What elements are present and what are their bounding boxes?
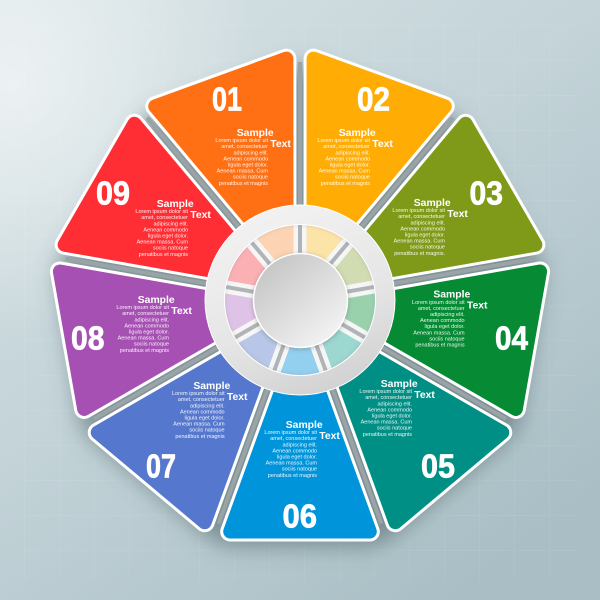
shape 07 xyxy=(98,290,325,522)
text block 06: penatibus et magnis xyxy=(268,473,317,479)
text block 07: Lorem ipsum dolor sit xyxy=(172,391,225,397)
text block 02: ligula eget dolor. xyxy=(330,162,370,168)
number 01: 01 xyxy=(212,80,242,118)
text block 01: Lorem ipsum dolor sit xyxy=(215,138,268,144)
segment 04 green xyxy=(332,239,540,409)
pastel colour wheel xyxy=(221,220,379,378)
text block 06: sociis natoque xyxy=(282,467,317,473)
text block 05 xyxy=(359,379,435,438)
number 02: 02 xyxy=(357,80,390,118)
text block 04: Aenean massa. Cum xyxy=(413,330,465,336)
text block 06: ligula eget dolor. xyxy=(277,454,317,460)
text block 05: amet, consectetuer xyxy=(365,395,412,401)
segment 02 amber xyxy=(250,59,445,282)
text block 03: Sample xyxy=(414,198,451,209)
shape 02 xyxy=(250,59,445,282)
text block 05: penatibus et magnis xyxy=(363,432,412,438)
text block 07 xyxy=(172,381,248,440)
text block 07: penatibus et magnis xyxy=(175,434,225,440)
text block 06: Lorem ipsum dolor sit xyxy=(264,430,317,436)
text block 01: Sample xyxy=(237,128,274,139)
number 07: 07 xyxy=(146,448,176,484)
text block 03: ligula eget dolor. xyxy=(405,232,445,238)
text block 09: Sample xyxy=(157,199,194,210)
number 09: 09 xyxy=(96,174,130,212)
text block 03: Lorem ipsum dolor sit xyxy=(392,208,445,214)
text block 04: ligula eget dolor. xyxy=(425,324,465,330)
shape 08 xyxy=(60,239,268,409)
text block 01: Text xyxy=(270,139,291,150)
number 08: 08 xyxy=(71,320,104,356)
text block 09: penatibus et magnis xyxy=(139,252,188,258)
shape 01 xyxy=(155,59,350,282)
text block 03: Text xyxy=(447,209,468,220)
text block 06: Sample xyxy=(286,420,323,431)
text block 07: amet, consectetuer xyxy=(178,397,225,403)
shape 05 xyxy=(275,290,502,522)
text block 06: Aenean massa. Cum xyxy=(266,461,317,467)
text block 02: penatibus et magnis xyxy=(321,181,370,187)
text block 09: Aenean massa. Cum xyxy=(137,240,188,246)
segment 08 purple xyxy=(60,239,268,409)
central hub xyxy=(205,205,395,395)
text block 05: sociis natoque xyxy=(377,426,412,432)
shape 03 xyxy=(304,124,535,338)
text block 06: Aenean commodo xyxy=(272,448,317,454)
text block 02: Sample xyxy=(339,128,376,139)
text block 07: Sample xyxy=(193,381,231,392)
number 04: 04 xyxy=(495,320,529,356)
text block 08: adipiscing elit. xyxy=(134,317,169,323)
text block 05: Lorem ipsum dolor sit xyxy=(359,389,412,395)
text block 04: Aenean commodo xyxy=(420,318,465,324)
text block 04: Sample xyxy=(433,290,471,301)
outer ring xyxy=(205,205,395,395)
text block 01: ligula eget dolor. xyxy=(228,162,268,168)
text block 02 xyxy=(317,128,393,187)
text block 02: Lorem ipsum dolor sit xyxy=(317,138,370,144)
text block 09: amet, consectetuer xyxy=(141,215,188,221)
text block 08: amet, consectetuer xyxy=(122,311,169,317)
text block 03: adipiscing elit. xyxy=(410,220,445,226)
centre cap xyxy=(252,254,348,350)
text block 01: amet, consectetuer xyxy=(221,144,268,150)
text block 04: Lorem ipsum dolor sit xyxy=(412,300,465,306)
text block 05: adipiscing elit. xyxy=(377,401,412,407)
text block 05: Aenean commodo xyxy=(367,407,412,413)
text block 01 xyxy=(215,128,291,187)
text block 02: sociis natoque xyxy=(335,175,370,181)
text block 03: penatibus et magnis. xyxy=(394,251,445,257)
text block 04 xyxy=(412,290,488,348)
text block 04: adipiscing elit. xyxy=(430,312,465,318)
segment 06 blue xyxy=(230,345,370,534)
text block 03: Aenean massa. Cum xyxy=(394,239,445,245)
text block 02: Text xyxy=(372,139,393,150)
text block 03 xyxy=(392,198,468,257)
text block 03: amet, consectetuer xyxy=(398,214,445,220)
text block 01: sociis natoque xyxy=(233,175,268,181)
text block 06: Text xyxy=(319,431,340,442)
text block 08: ligula eget dolor. xyxy=(129,330,169,336)
text block 08: penatibus et magnis xyxy=(120,348,169,354)
text block 05: Text xyxy=(414,390,435,401)
grey gaps between segments xyxy=(66,62,534,524)
text block 09 xyxy=(135,199,211,258)
number 06: 06 xyxy=(282,498,317,534)
text block 09: adipiscing elit. xyxy=(153,221,188,227)
spokes xyxy=(223,222,377,373)
text block 08 xyxy=(116,295,192,354)
text block 01: adipiscing elit. xyxy=(233,150,268,156)
shape 04 xyxy=(332,239,540,409)
text block 09: Text xyxy=(190,210,211,221)
text block 01: Aenean commodo xyxy=(223,156,268,162)
text block 03: Aenean commodo xyxy=(400,226,445,232)
segment 05 teal xyxy=(275,290,502,522)
text block 08: Sample xyxy=(138,295,175,306)
text block 05: ligula eget dolor. xyxy=(372,414,412,420)
text block 07: Text xyxy=(227,392,248,403)
number 05: 05 xyxy=(421,448,455,484)
text block 09: sociis natoque xyxy=(153,246,188,252)
text block 08: Aenean massa. Cum xyxy=(118,336,169,342)
text block 02: amet, consectetuer xyxy=(323,144,370,150)
text block 07: ligula eget dolor. xyxy=(185,416,225,422)
text block 08: Lorem ipsum dolor sit xyxy=(116,305,169,311)
text block 05: Aenean massa. Cum xyxy=(361,420,412,426)
segment 01 orange xyxy=(155,59,350,282)
segment 03 olive xyxy=(304,124,535,338)
text block 07: adipiscing elit. xyxy=(190,403,225,409)
text block 09: ligula eget dolor. xyxy=(148,234,188,240)
text block 09: Lorem ipsum dolor sit xyxy=(135,209,188,215)
text block 04: penatibus et magnis xyxy=(415,343,465,349)
text block 06: amet, consectetuer xyxy=(270,436,317,442)
shape 06 xyxy=(230,345,370,532)
text block 02: adipiscing elit. xyxy=(335,150,370,156)
text block 04: Text xyxy=(467,301,488,312)
text block 02: Aenean massa. Cum xyxy=(319,169,370,175)
text block 06: adipiscing elit. xyxy=(282,442,317,448)
text block 09: Aenean commodo xyxy=(143,227,188,233)
text block 07: sociis natoque xyxy=(189,428,225,434)
text block 02: Aenean commodo xyxy=(325,156,370,162)
text block 01: Aenean massa. Cum xyxy=(217,169,268,175)
text block 04: sociis natoque xyxy=(429,336,465,342)
segment 09 red xyxy=(65,124,296,338)
text block 08: Aenean commodo xyxy=(124,323,169,329)
text block 03: sociis natoque xyxy=(410,245,445,251)
text block 05: Sample xyxy=(381,379,418,390)
text block 08: sociis natoque xyxy=(134,342,169,348)
text block 08: Text xyxy=(171,306,192,317)
text block 06 xyxy=(264,420,340,479)
segment 07 indigo xyxy=(98,290,325,522)
shape 09 xyxy=(65,124,296,338)
text block 01: penatibus et magnis xyxy=(219,181,268,187)
number 03: 03 xyxy=(470,174,503,212)
text block 04: amet, consectetuer xyxy=(418,306,465,312)
wheel drop shadow xyxy=(56,65,544,547)
text block 07: Aenean massa. Cum xyxy=(173,422,225,428)
text block 07: Aenean commodo xyxy=(180,409,225,415)
